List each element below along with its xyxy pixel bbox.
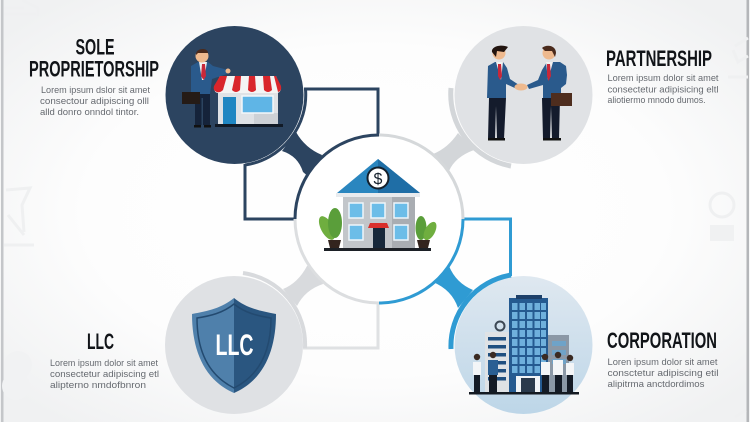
panel: partnership circle	[451, 26, 592, 166]
shield label: LLC	[216, 329, 254, 362]
connector neck: corporation	[433, 266, 473, 308]
connector neck: sole proprietorship	[282, 132, 322, 178]
description: Lorem ipsum dslor sit amet	[41, 85, 150, 96]
description: aliotiermo mnodo dumos.	[608, 95, 706, 106]
panel: LLC circle	[165, 273, 305, 414]
icon: shield	[192, 298, 276, 393]
ring segment top right	[379, 135, 463, 219]
icon: left businessman	[487, 46, 519, 141]
left edge bar	[1, 0, 4, 422]
connector neck: partnership	[433, 133, 474, 176]
right edge bar	[746, 0, 749, 422]
description: consectetur adipisicing eltl	[608, 84, 718, 96]
panel: corporation circle	[451, 275, 592, 414]
centre circle	[295, 135, 463, 303]
circle background	[454, 26, 592, 164]
icon: storefront	[214, 76, 283, 127]
description	[608, 73, 719, 106]
panel: centre circle with bank building	[295, 135, 463, 303]
text block: sole proprietorship: PROPRIETORSHIP	[29, 56, 159, 82]
outer arc	[243, 273, 305, 348]
connector: blue frame for corporation	[461, 219, 510, 276]
icon: staff group	[473, 352, 574, 392]
description	[40, 85, 150, 118]
ring segment bottom left	[295, 219, 379, 303]
icon: bank building: $	[374, 171, 383, 188]
text block: corporation	[607, 328, 718, 390]
ring segment top left	[295, 135, 379, 219]
text block: sole proprietorship	[29, 34, 159, 118]
connector neck: LLC	[283, 262, 323, 306]
description: consectetur adipiscing etl	[50, 369, 159, 380]
description: consectour adipiscing olll	[40, 96, 149, 107]
panel: sole proprietorship circle	[166, 26, 306, 165]
description: consctetur adipiscing etil	[608, 368, 718, 379]
icon: handshake	[514, 84, 528, 90]
text block: LLC	[50, 329, 159, 391]
icon: bank building	[316, 159, 439, 251]
heading: SOLE	[76, 34, 114, 60]
icon: right plant	[416, 216, 439, 248]
icon: left plant	[316, 208, 342, 248]
outer arc	[245, 89, 306, 165]
circle background	[454, 276, 592, 414]
outer arc	[451, 275, 511, 349]
connectors: grey frame for LLC	[303, 303, 378, 348]
ring segment bottom right	[379, 219, 463, 303]
description: alipterno nmdofbnron	[50, 380, 146, 391]
circle background	[165, 276, 303, 414]
description	[608, 357, 718, 390]
description: alld donro onndol tintor.	[40, 107, 139, 118]
connectors: navy frame for sole proprietorship	[245, 89, 378, 219]
description	[50, 358, 159, 391]
description: Lorem ipsum dolor sit amet	[608, 73, 719, 84]
description: alipitrma anctdordimos	[608, 379, 705, 390]
description: Loren ipsum dolor sit amet	[608, 357, 718, 368]
circle background	[166, 26, 304, 164]
icon: office towers	[469, 295, 579, 394]
description: Lorem ipsum dolor sit amet	[50, 358, 158, 369]
heading: LLC	[87, 329, 114, 354]
outer arc	[451, 88, 511, 166]
text block: partnership	[606, 46, 719, 106]
icon: right businessman	[527, 46, 572, 140]
icon: businessman	[182, 49, 230, 128]
